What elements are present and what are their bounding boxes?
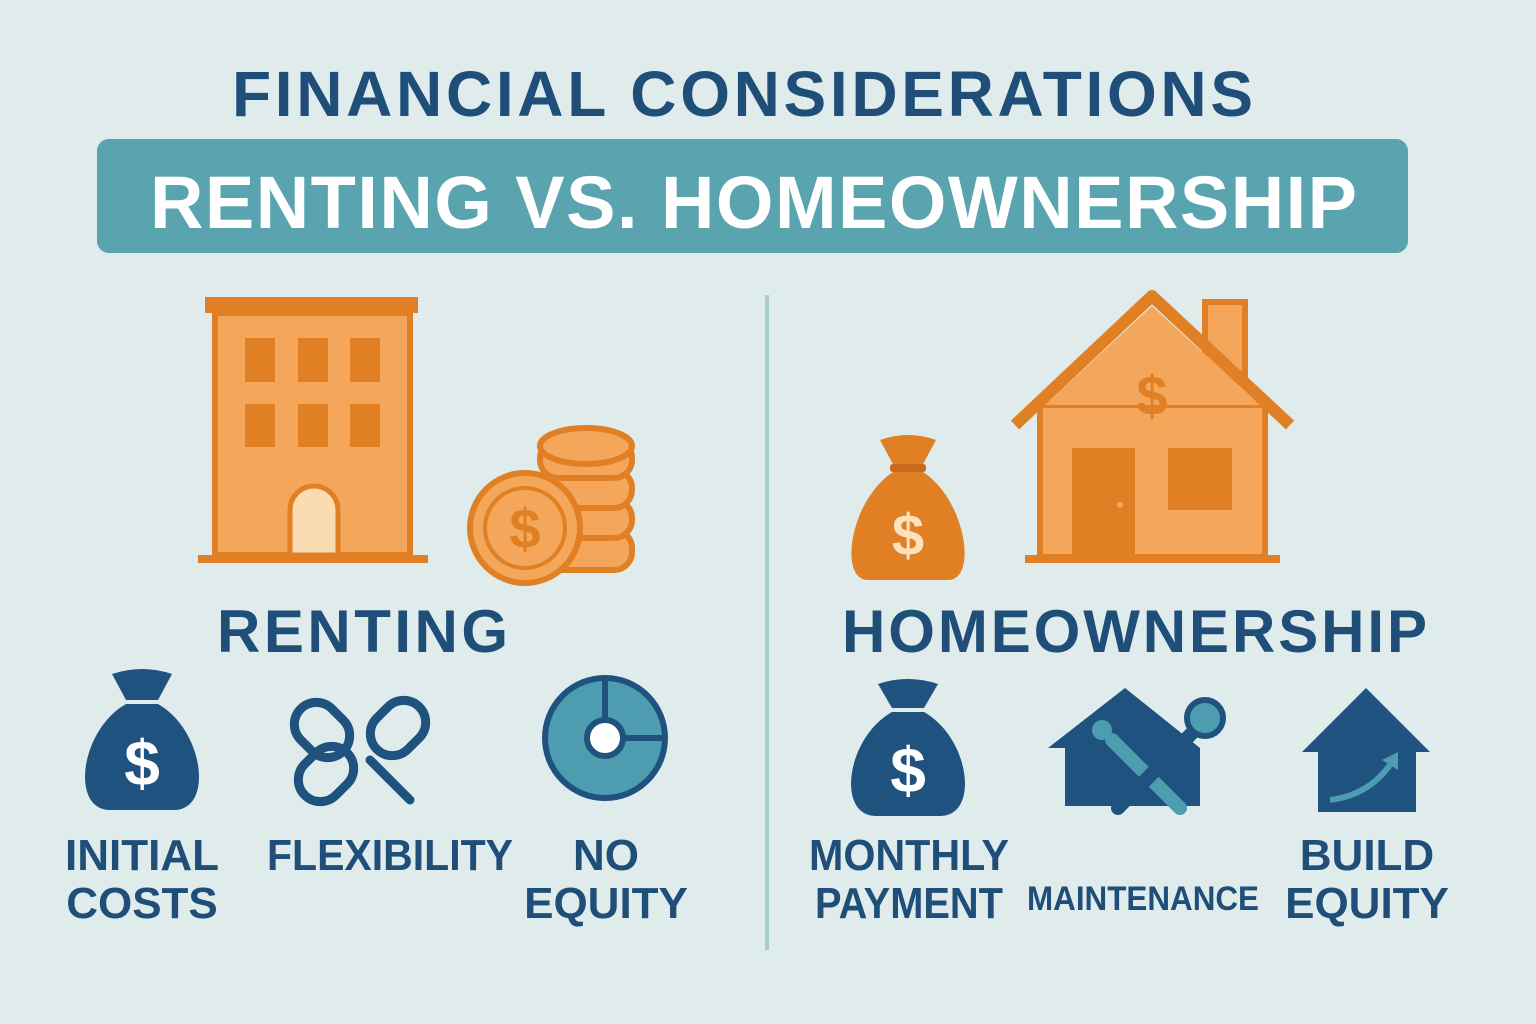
- icon: orange money bag: [851, 435, 965, 580]
- icon: money bag initial costs: [85, 669, 199, 810]
- icon: money bag initial costs: $: [124, 727, 160, 799]
- label: no equity: EQUITY: [524, 879, 688, 928]
- label: no equity: NO: [573, 831, 639, 880]
- banner: [97, 139, 1408, 253]
- icon: money bag monthly payment: [851, 679, 965, 816]
- icon: coins: [470, 428, 632, 583]
- label: monthly payment: MONTHLY: [809, 831, 1009, 880]
- icon: pie no equity: [545, 678, 665, 798]
- banner: RENTING VS. HOMEOWNERSHIP: [150, 161, 1357, 244]
- label: initial costs: COSTS: [66, 879, 218, 928]
- label: flexibility: FLEXIBILITY: [267, 831, 513, 880]
- label: initial costs: INITIAL: [65, 831, 219, 880]
- icon: broken chain flexibility: [285, 691, 435, 811]
- icon: house with tools maintenance: [1048, 688, 1223, 808]
- icon: coins: $: [509, 497, 541, 560]
- heading: renting: RENTING: [217, 598, 508, 665]
- heading: homeownership: HOMEOWNERSHIP: [842, 598, 1427, 665]
- label: monthly payment: PAYMENT: [815, 879, 1003, 928]
- label: maintenance: MAINTENANCE: [1027, 880, 1259, 918]
- title: FINANCIAL CONSIDERATIONS: [232, 58, 1253, 130]
- label: build equity: BUILD: [1300, 831, 1434, 880]
- icon: house: $: [1136, 364, 1168, 427]
- label: build equity: EQUITY: [1285, 879, 1449, 928]
- icon: money bag monthly payment: $: [890, 734, 926, 806]
- icon: apartment building: [198, 297, 428, 563]
- icon: house build equity: [1302, 688, 1430, 812]
- icon: house: [1015, 296, 1290, 563]
- icon: orange money bag: $: [892, 503, 924, 568]
